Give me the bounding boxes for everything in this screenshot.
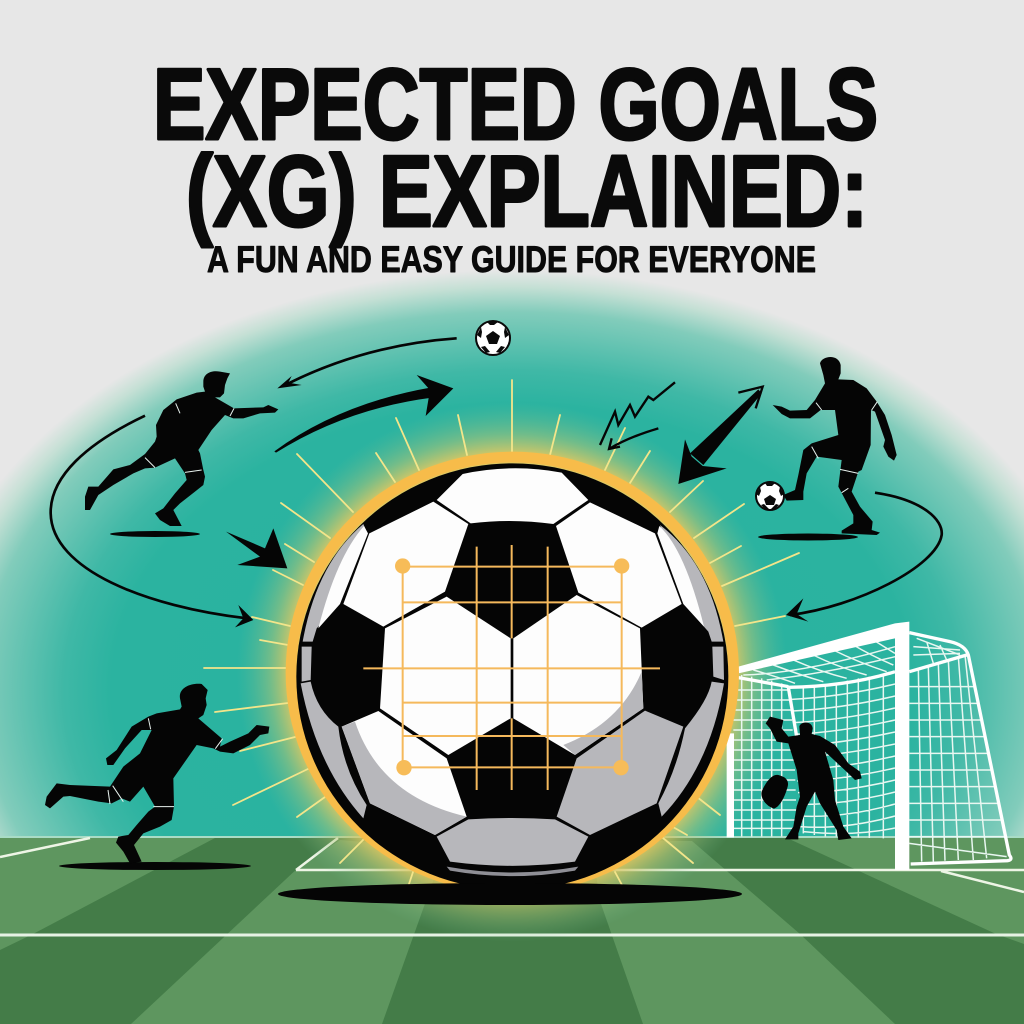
- arrow: long arc to ball: [51, 416, 253, 627]
- zigzag motion mark: [600, 382, 675, 449]
- player shadows: [59, 531, 858, 870]
- goalkeeper glove blob: [761, 775, 788, 809]
- radiating rays: [204, 380, 799, 887]
- goal frame: [738, 633, 1011, 864]
- arrow: right arc to ball: [786, 493, 942, 622]
- small ball: at player two foot: [756, 482, 784, 510]
- player three silhouette: [45, 684, 269, 863]
- xG analysis grid: [363, 545, 660, 790]
- player two silhouette: [773, 357, 897, 535]
- central soccer ball: [291, 457, 734, 890]
- white sliver highlights: [318, 526, 704, 628]
- arrow: thin curve towards player one: [277, 338, 457, 388]
- ball orange ring: [291, 457, 734, 888]
- small ball: top: [476, 321, 510, 355]
- arrow: thick curve towards small ball: [274, 375, 453, 453]
- ball body: [296, 463, 728, 890]
- goalkeeper silhouette: [761, 717, 862, 840]
- title: (XG) EXPLAINED:: [186, 136, 868, 248]
- teal stadium glow: [0, 250, 1024, 850]
- football pitch: [0, 836, 1024, 1024]
- title: A FUN AND EASY GUIDE FOR EVERYONE: [207, 239, 816, 280]
- ball bottom sliver: [447, 867, 578, 876]
- white upper panels: [342, 468, 682, 835]
- arrows, left: [51, 338, 457, 627]
- arrow: double-headed: [678, 387, 763, 484]
- arrow: fat arrow to ball: [226, 528, 287, 568]
- goal net: [733, 638, 1007, 862]
- golden glow behind ball: [237, 402, 787, 942]
- ball ground shadow: [278, 883, 742, 905]
- title: [153, 49, 878, 280]
- arrows, right: [600, 382, 942, 622]
- player one silhouette: [85, 371, 278, 526]
- grey shaded panels: [301, 524, 724, 866]
- goal: [727, 622, 1011, 870]
